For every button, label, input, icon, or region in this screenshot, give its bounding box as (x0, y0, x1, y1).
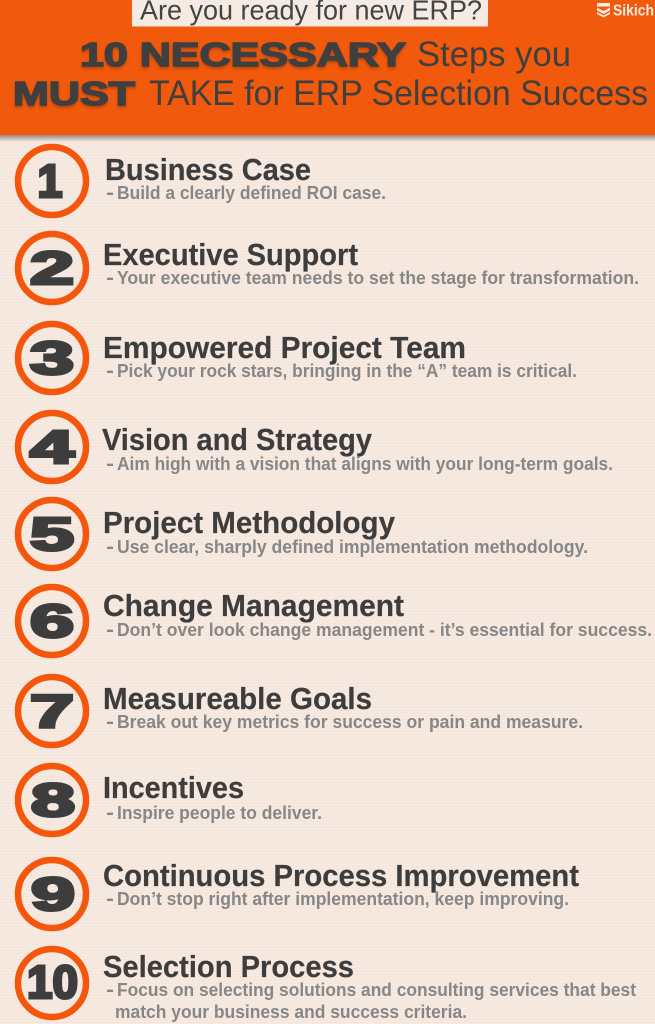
step 6: Change Management (103, 589, 404, 623)
step 4: 4 (30, 421, 75, 473)
title: TAKE for ERP Selection Success (149, 74, 648, 113)
title: 10 NECESSARY (80, 38, 406, 75)
step 2: Your executive team needs to set the stage for transformation. (117, 268, 639, 288)
step 5: 5 (30, 508, 74, 560)
step 4: Aim high with a vision that aligns with your long-term goals. (117, 454, 613, 474)
title: MUST (13, 75, 135, 112)
step 7: - (106, 712, 114, 733)
step 7 (18, 677, 583, 745)
step 1 (18, 147, 386, 215)
step 2: 2 (30, 242, 74, 294)
step 8: Inspire people to deliver. (117, 803, 322, 823)
title: Steps you (417, 35, 571, 74)
step 7: Break out key metrics for success or pain and measure. (117, 712, 583, 732)
step 8: 8 (31, 774, 75, 826)
step 9: 9 (31, 868, 75, 920)
step 5: - (106, 537, 114, 558)
step 3 (18, 324, 577, 392)
step 7: Measureable Goals (103, 682, 372, 716)
title: 10 NECESSARY (80, 36, 406, 73)
step 10 (18, 949, 636, 1022)
step 10: - (106, 980, 114, 1001)
step 8 (18, 766, 322, 834)
step 6 (18, 587, 652, 655)
step 9: Continuous Process Improvement (103, 859, 579, 893)
step 2: - (106, 268, 114, 289)
step 5 (18, 500, 588, 568)
step 9 (18, 859, 579, 928)
step 10: match your business and success criteria. (115, 1002, 467, 1022)
step 8: - (106, 803, 114, 824)
step 6: Don’t over look change management - it’s essential for success. (117, 620, 652, 640)
step 10: Focus on selecting solutions and consulting services that best (117, 980, 636, 1000)
step 10: 10 (27, 956, 78, 1008)
step 3: - (106, 361, 114, 382)
header banner (0, 0, 655, 142)
step 3: Empowered Project Team (103, 331, 466, 365)
step 4: - (106, 454, 114, 475)
step 7: 7 (30, 685, 74, 737)
step 9: Don’t stop right after implementation, keep improving. (117, 889, 569, 909)
step 1: - (106, 183, 114, 204)
step 4 (18, 413, 613, 481)
step 5: Use clear, sharply defined implementation methodology. (117, 537, 588, 557)
title: MUST (13, 77, 135, 114)
step 1: Build a clearly defined ROI case. (117, 183, 386, 203)
title (13, 35, 648, 114)
step 4: Vision and Strategy (102, 423, 372, 457)
step 8: Incentives (103, 771, 244, 805)
step 3: 3 (30, 332, 74, 384)
step 1: 1 (38, 155, 62, 207)
step 6: 6 (30, 595, 74, 647)
step 9: - (106, 889, 114, 910)
step 2 (18, 234, 639, 302)
step 10: Selection Process (103, 950, 354, 984)
step 2: Executive Support (103, 238, 358, 272)
step 1: Business Case (105, 153, 311, 187)
step 6: - (106, 620, 114, 641)
step 5: Project Methodology (103, 506, 395, 540)
step 3: Pick your rock stars, bringing in the “A” team is critical. (117, 361, 577, 381)
